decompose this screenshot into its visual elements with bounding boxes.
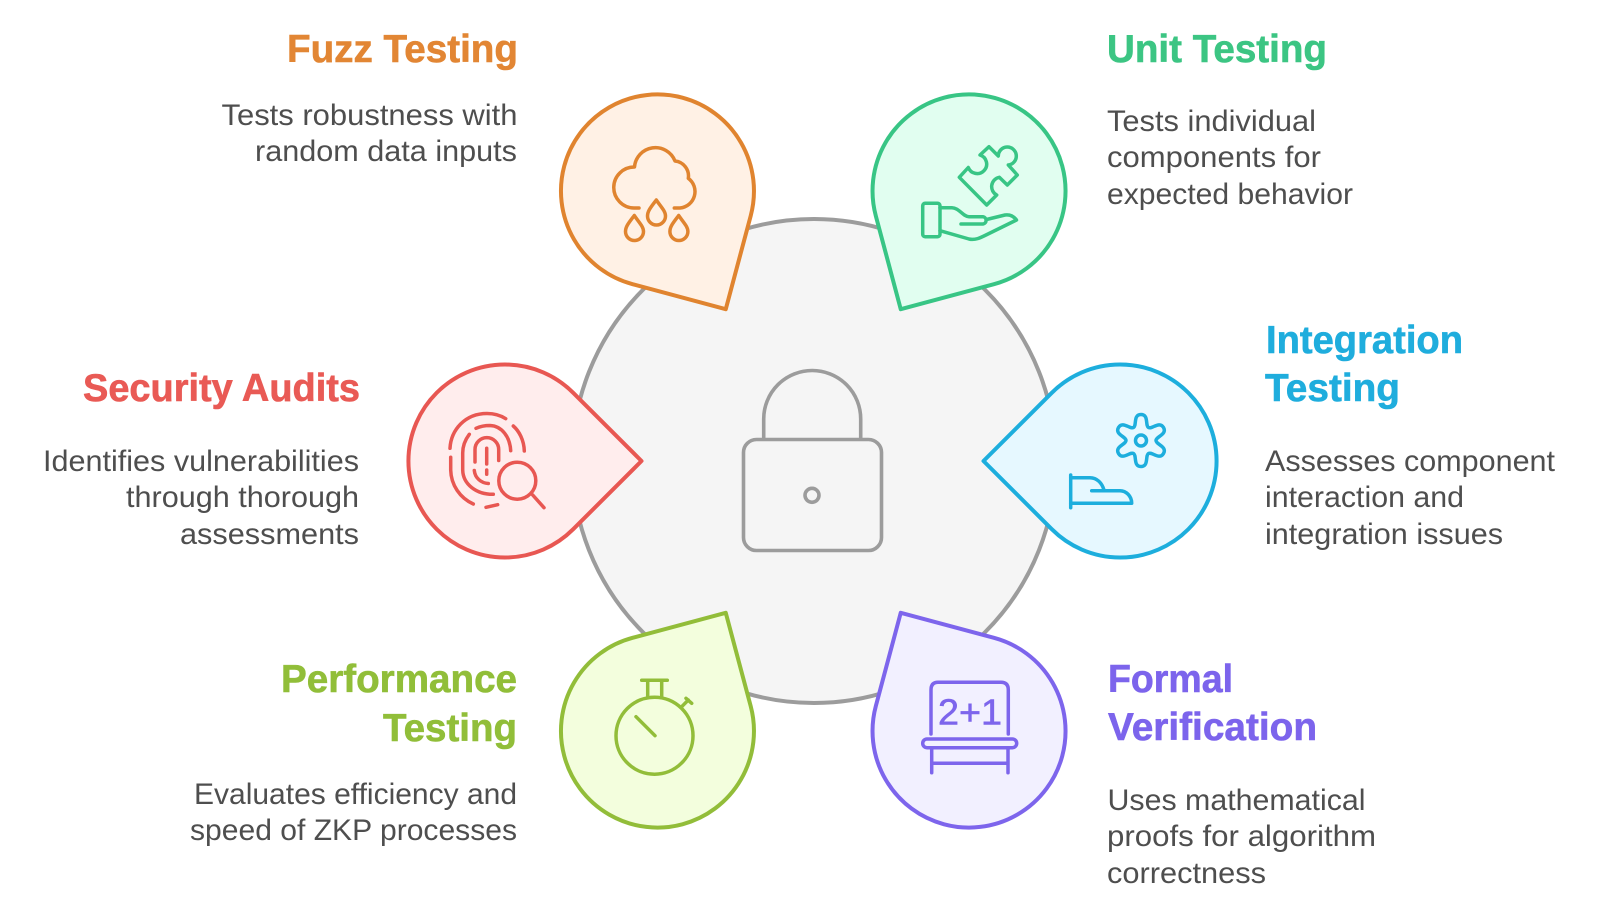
heading: Unit Testing: Unit Testing xyxy=(1107,28,1327,71)
description: Formal Verification: correctness xyxy=(1107,857,1266,890)
panel: Unit Testing xyxy=(817,28,1353,357)
icon: chalkboard with sum: 2+1 xyxy=(938,691,1002,732)
description: Security Audits: through thorough xyxy=(126,481,359,514)
heading: Integration Testing: Integration xyxy=(1266,319,1463,362)
description: Integration Testing: Assesses component xyxy=(1265,445,1556,478)
description: Security Audits: assessments xyxy=(180,518,359,551)
panel: Performance Testing xyxy=(190,565,809,863)
description: Unit Testing: components for xyxy=(1107,141,1321,174)
heading: Fuzz Testing: Fuzz Testing xyxy=(287,28,518,71)
teardrop: Fuzz Testing xyxy=(526,59,809,357)
description: Fuzz Testing: random data inputs xyxy=(255,135,517,168)
description: Integration Testing: integration issues xyxy=(1265,518,1503,551)
description: Formal Verification: proofs for algorithm xyxy=(1107,820,1376,853)
icon: rain cloud xyxy=(614,148,695,241)
description: Performance Testing: Evaluates efficiency and xyxy=(194,778,517,811)
panel: Fuzz Testing xyxy=(222,28,809,357)
description: Integration Testing: interaction and xyxy=(1265,481,1464,514)
description: Fuzz Testing: Tests robustness with xyxy=(222,99,518,132)
central circle with lock xyxy=(572,219,1056,703)
heading: Formal Verification: Verification xyxy=(1108,706,1317,749)
panel: Formal Verification xyxy=(817,565,1376,890)
icon: stopwatch xyxy=(616,680,693,774)
panel: Integration Testing xyxy=(984,319,1556,558)
description: Fuzz Testing xyxy=(222,99,518,168)
icon: chalkboard with sum xyxy=(923,682,1017,773)
icon: padlock xyxy=(744,370,882,550)
heading: Integration Testing: Testing xyxy=(1265,367,1400,410)
teardrop: Formal Verification xyxy=(817,565,1101,863)
description: Unit Testing: expected behavior xyxy=(1107,178,1353,211)
icon: gear over hand xyxy=(1071,414,1164,508)
heading: Performance Testing: Testing xyxy=(383,707,517,750)
teardrop: Security Audits xyxy=(408,364,642,558)
icon: hand holding puzzle piece xyxy=(923,147,1017,239)
description: Formal Verification xyxy=(1107,784,1376,890)
icon: fingerprint with magnifier xyxy=(450,414,544,508)
heading: Formal Verification: Formal xyxy=(1108,658,1233,701)
description: Performance Testing xyxy=(190,778,517,847)
description: Unit Testing xyxy=(1107,105,1353,211)
description: Unit Testing: Tests individual xyxy=(1107,105,1316,138)
teardrop: Unit Testing xyxy=(817,59,1101,357)
description: Performance Testing: speed of ZKP processes xyxy=(190,814,517,847)
heading: Performance Testing xyxy=(281,658,517,750)
description: Formal Verification: Uses mathematical xyxy=(1108,784,1366,817)
teardrop: Integration Testing xyxy=(984,364,1217,558)
description: Integration Testing xyxy=(1265,445,1556,551)
heading: Integration Testing xyxy=(1265,319,1463,410)
heading: Performance Testing: Performance xyxy=(281,658,517,701)
teardrop: Performance Testing xyxy=(526,565,809,863)
heading: Formal Verification xyxy=(1108,658,1317,749)
description: Security Audits xyxy=(43,445,359,551)
heading: Security Audits: Security Audits xyxy=(83,367,360,410)
description: Security Audits: Identifies vulnerabilities xyxy=(43,445,359,478)
panel: Security Audits xyxy=(43,364,642,558)
